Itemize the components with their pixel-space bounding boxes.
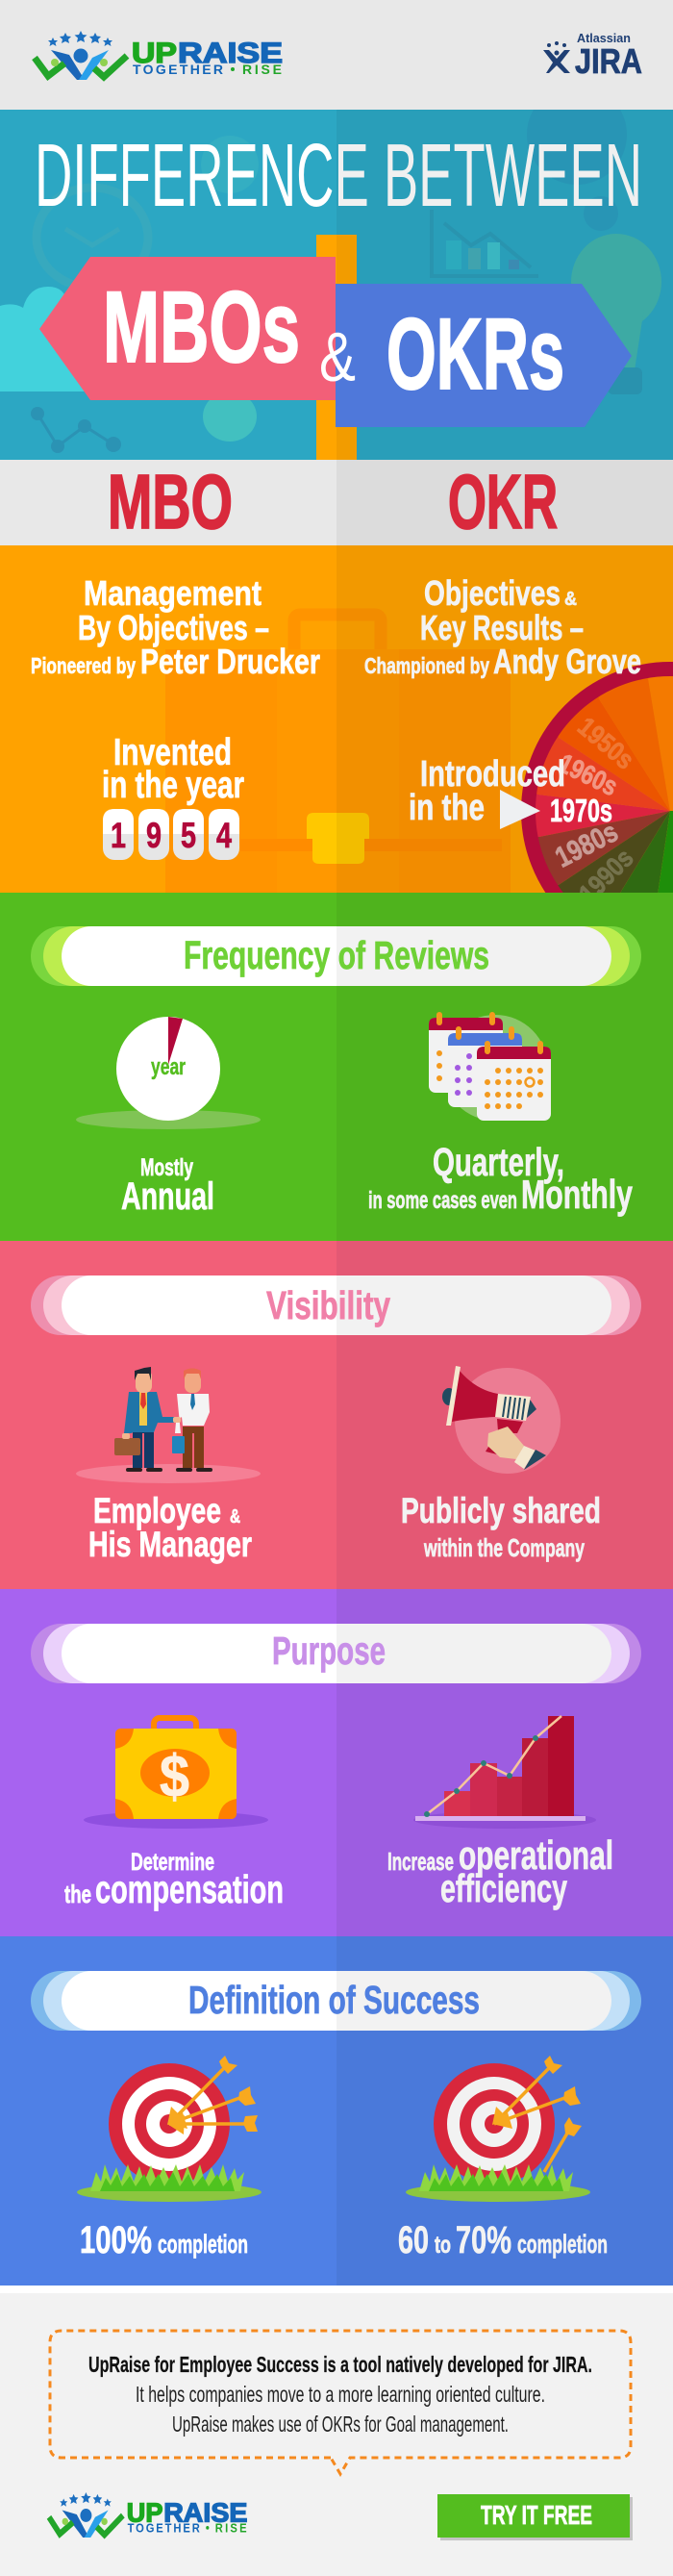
text: mostly annual: Annual [121,1175,214,1218]
UpRaise logo [35,31,283,80]
text: quarterly: Quarterly, [433,1140,564,1184]
banner [31,1275,641,1335]
text: Objectives and Key Results: Championed by [364,653,489,678]
icon: target with three hits [77,2056,262,2202]
Atlassian JIRA logo: JIRA [575,41,642,81]
background icons [0,85,661,453]
text: introduced in the 1970s [409,754,612,829]
banner [31,1971,641,2031]
text: Objectives and Key Results: & [564,589,577,610]
panel: definitions and origin [0,545,673,893]
text: introduced in the 1970s: in the [409,788,485,828]
text: employee and his manager: Employee [93,1491,221,1530]
UpRaise logo: RAISE [178,38,283,69]
icon: employee and manager [76,1367,261,1483]
banner: Frequency of Reviews [184,933,489,977]
text: determine the compensation: compensation [95,1867,284,1911]
year counter 1954: 5 [181,816,196,855]
icon: target with two hits and one miss [406,2056,590,2202]
UpRaise logo, footer: TOGETHER [128,2521,200,2536]
decade wheel [521,662,673,893]
text: publicly shared: within the Company [423,1533,585,1562]
Atlassian JIRA logo: Atlassian [577,31,631,45]
icon: year pie: year [151,1054,186,1080]
text: increase operational efficiency [387,1832,613,1910]
UpRaise logo, footer: RAISE [163,2499,247,2528]
text: introduced in the 1970s: 1970s [550,793,612,828]
banner: Purpose [272,1629,386,1673]
text: 60 to 70% completion: 70% [456,2219,511,2261]
text: Objectives and Key Results [364,573,641,681]
icon: year pie [76,1017,261,1129]
text: employee and his manager [88,1491,252,1564]
hero panel [0,85,673,460]
text: Objectives and Key Results: Objectives [424,573,561,613]
text: Management by Objectives: Peter Drucker [140,642,320,681]
blue arrow: OKRs [336,284,632,427]
text: Management by Objectives: Management [84,573,262,613]
text: 60 to 70% completion: to [435,2232,451,2259]
year counter 1954: 1 [111,816,126,855]
decade wheel: 1990s [573,843,639,909]
pink arrow: MBOs: MBOs [103,271,300,384]
text: invented in the year [102,732,244,806]
manager figure [172,1368,212,1472]
footer panel [0,2286,673,2576]
text: increase operational efficiency: Increase [387,1847,454,1876]
heading: OKR: OKR [448,459,558,544]
text: publicly shared: Publicly shared [401,1491,601,1530]
text: 60 to 70% completion: 60 [398,2219,429,2261]
decade wheel: 1950s [572,712,640,775]
employee figure [114,1367,175,1472]
orange signpost [316,235,357,460]
year counter 1954 [103,809,239,860]
text: invented in the year: Invented [113,732,232,773]
Atlassian JIRA logo [543,31,642,81]
text: 60 to 70% completion: completion [517,2230,608,2259]
text: quarterly [368,1140,633,1217]
text: determine the compensation [64,1849,284,1911]
text: employee and his manager: His Manager [88,1525,252,1564]
text: 100% completion [80,2219,248,2261]
panel: frequency of reviews [0,893,673,1241]
ampersand: & [319,319,356,396]
text: Objectives and Key Results: Key Results – [420,608,584,647]
UpRaise logo: UP [132,38,177,69]
text: quarterly: in some cases even [368,1187,517,1214]
background briefcase [165,615,511,893]
text: increase operational efficiency: efficiency [440,1866,567,1910]
banner: Visibility [266,1283,390,1327]
UpRaise logo: TOGETHER [133,62,223,77]
UpRaise logo: RISE [242,62,282,77]
text: Management by Objectives: Pioneered by [31,653,136,678]
decade wheel: 1960s [554,747,622,801]
header bar [0,0,673,110]
text: employee and his manager: & [230,1506,240,1528]
text: 100% completion: completion [158,2230,248,2259]
blue arrow: OKRs: OKRs [386,298,564,411]
heading: MBO: MBO [108,459,233,544]
banner [31,1624,641,1683]
text: determine the compensation: Determine [131,1849,214,1876]
text: quarterly: Monthly [521,1172,633,1217]
column headings [0,459,673,545]
year counter 1954: 4 [216,816,232,855]
text: publicly shared [401,1491,601,1562]
text: Management by Objectives [31,573,320,681]
callout [50,2331,631,2474]
text: mostly annual [121,1154,214,1218]
icon: money briefcase: $ [160,1744,189,1810]
callout: UpRaise makes use of OKRs for Goal management. [172,2412,509,2437]
chart: rising bars [413,1716,596,1829]
button: try it free [437,2494,633,2540]
text: invented in the year: in the year [102,765,244,806]
pink arrow: MBOs [39,257,336,400]
text: 60 to 70% completion [398,2219,608,2261]
UpRaise logo, footer [49,2492,247,2538]
UpRaise logo, footer: RISE [215,2521,247,2536]
text: 100% completion: 100% [80,2219,152,2261]
text: mostly annual: Mostly [140,1154,193,1181]
panel: purpose [0,1589,673,1936]
panel: definition of success [0,1936,673,2286]
text: Management by Objectives: By Objectives – [78,608,269,647]
banner [31,926,641,986]
decade wheel: 1980s [550,816,623,874]
icon: money briefcase [84,1718,268,1829]
year counter 1954: 9 [146,816,162,855]
UpRaise logo, footer: UP [127,2499,162,2528]
icon: calendars [429,1012,551,1121]
text: determine the compensation: the [64,1880,91,1908]
text: introduced in the 1970s: Introduced [420,754,565,795]
text: increase operational efficiency: operational [459,1832,613,1878]
banner: Definition of Success [188,1978,480,2022]
panel: visibility [0,1241,673,1589]
button: try it free: TRY IT FREE [481,2500,592,2530]
icon: megaphone [442,1366,561,1474]
